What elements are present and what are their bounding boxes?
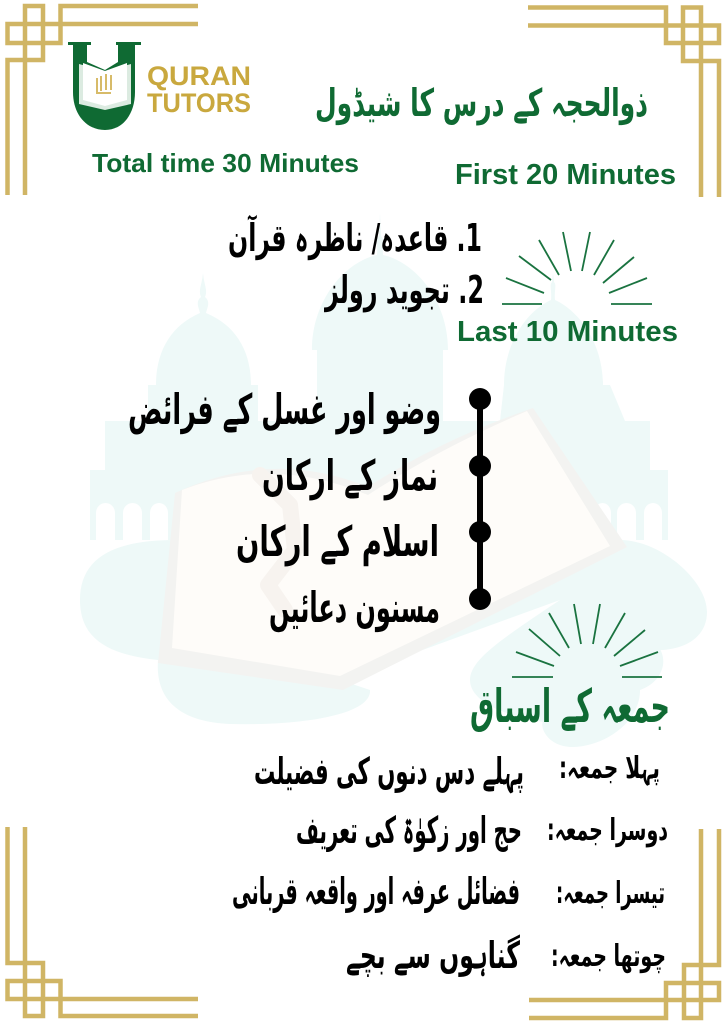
sunburst rays 2: [512, 604, 662, 677]
background: mosque window arches: [96, 503, 662, 540]
corner ornament: top right: [528, 8, 719, 197]
last 10 minutes label: Last 10 Minutes: [457, 316, 678, 348]
row 2 text: حج اور زکوٰۃ کی تعریف: [296, 809, 522, 852]
topic 4: مسنون دعائیں: [269, 583, 440, 633]
corner ornament: top left: [8, 6, 198, 195]
corner ornament: bottom left: [8, 827, 198, 1016]
logo text: [147, 61, 251, 118]
logo text: QURAN: [147, 61, 251, 91]
topic 3: اسلام کے ارکان: [236, 517, 439, 567]
last 10 minutes topics: [128, 385, 441, 633]
row 1 text: پہلے دس دنوں کی فضیلت: [254, 750, 524, 794]
corner ornament: bottom right: [529, 829, 719, 1018]
row 1 label: پہلا جمعہ:: [559, 751, 660, 786]
list item 1: 1. قاعدہ/ ناظرہ قرآن: [228, 214, 482, 260]
list item 2: 2. تجوید رولز: [324, 268, 484, 313]
row 4 text: گناہوں سے بچے: [346, 934, 520, 977]
first 20 minutes list: [228, 214, 484, 313]
background: open book: [158, 408, 627, 690]
logo text: TUTORS: [147, 88, 251, 118]
Friday lessons list: [232, 750, 668, 977]
first 20 minutes label: First 20 Minutes: [455, 159, 676, 191]
topic 2: نماز کے ارکان: [262, 451, 438, 500]
logo: Quran Tutors: [68, 42, 251, 130]
logo icon: U with book: [68, 42, 141, 130]
sunburst rays 1: [502, 232, 652, 304]
total time label: Total time 30 Minutes: [92, 148, 359, 178]
topic 1: وضو اور غسل کے فرائض: [128, 385, 441, 435]
timeline: [469, 388, 491, 610]
background: mosque silhouette: [80, 213, 707, 747]
